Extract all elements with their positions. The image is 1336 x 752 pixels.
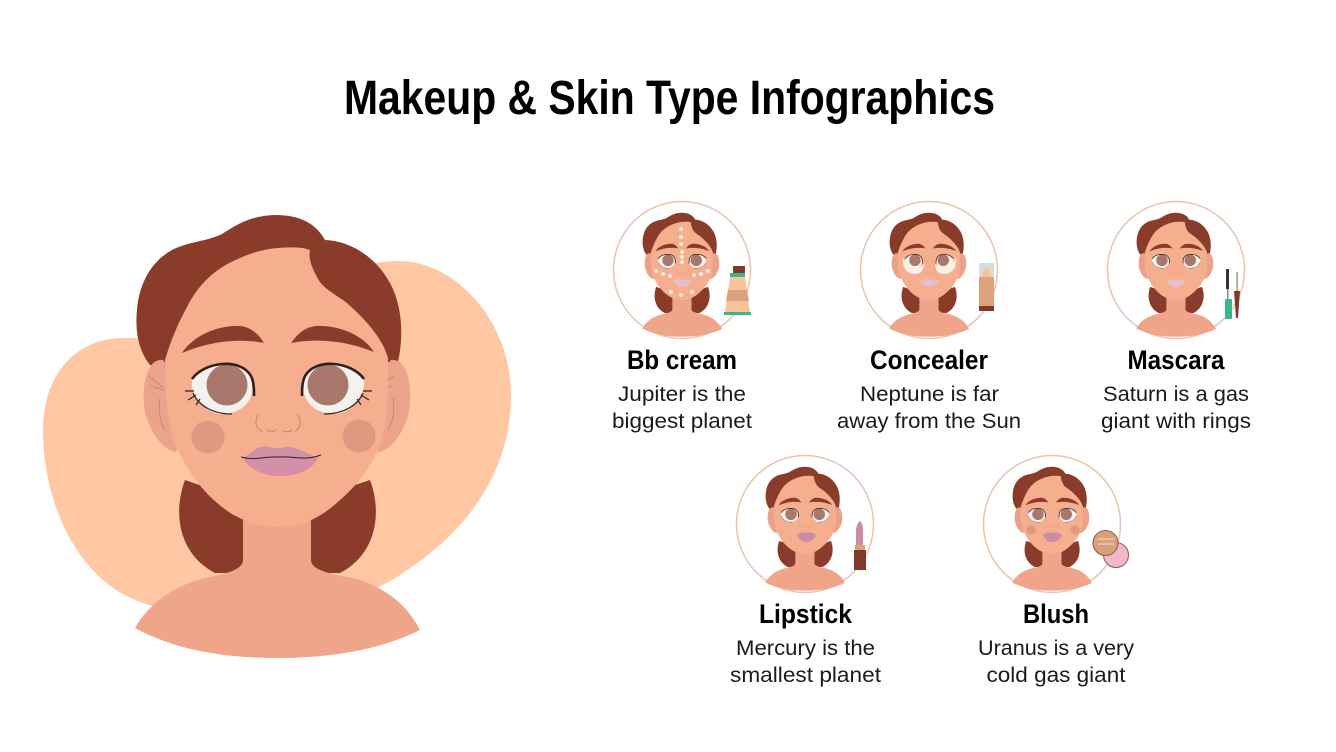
icon: cream tube [724, 266, 751, 315]
title: Makeup & Skin Type Infographics [344, 72, 995, 125]
description [1101, 382, 1251, 433]
description [837, 382, 1021, 433]
heading: Bb cream [627, 345, 737, 375]
panel: Mascara [1101, 202, 1251, 433]
panel: Bb cream [612, 202, 752, 433]
large face [135, 215, 420, 658]
description [978, 636, 1134, 687]
circle portrait [860, 202, 998, 338]
panel: Blush [978, 456, 1134, 687]
heading: Mascara [1128, 345, 1225, 375]
icon: mascara brush and wand [1225, 269, 1240, 319]
heading: Lipstick [759, 599, 853, 629]
heading: Blush [1023, 599, 1089, 629]
cream dots [654, 227, 710, 297]
circle portrait [736, 456, 874, 592]
blush cheeks [1026, 525, 1080, 535]
icon: blush compacts [1093, 530, 1128, 568]
description: giant with rings [1101, 409, 1251, 433]
description: Saturn is a gas [1103, 382, 1249, 406]
lips [920, 279, 939, 287]
circle portrait [984, 456, 1120, 592]
background blob [43, 261, 511, 616]
circle portrait [1108, 202, 1244, 338]
description: smallest planet [730, 663, 881, 687]
description: Mercury is the [736, 636, 875, 660]
description: Uranus is a very [978, 636, 1134, 660]
main illustration: face on peach blob [43, 215, 511, 658]
heading: Concealer [870, 345, 988, 375]
under-eye concealer [903, 258, 956, 274]
icon: concealer bottle [979, 263, 994, 311]
lips [797, 532, 816, 542]
description: Jupiter is the [618, 382, 746, 406]
description [730, 636, 881, 687]
circle portrait [614, 202, 750, 338]
panel: Lipstick [730, 456, 881, 687]
lips [1043, 532, 1062, 542]
eyelashes [185, 391, 372, 405]
panel: Concealer [837, 202, 1021, 433]
blush cheeks [192, 420, 376, 454]
description: away from the Sun [837, 409, 1021, 433]
description: cold gas giant [986, 663, 1126, 687]
icon: lipstick [854, 521, 866, 570]
description: Neptune is far [860, 382, 999, 406]
description: biggest planet [612, 409, 752, 433]
lips [241, 446, 321, 476]
lips [673, 279, 692, 287]
description [612, 382, 752, 433]
lips [1167, 279, 1186, 287]
